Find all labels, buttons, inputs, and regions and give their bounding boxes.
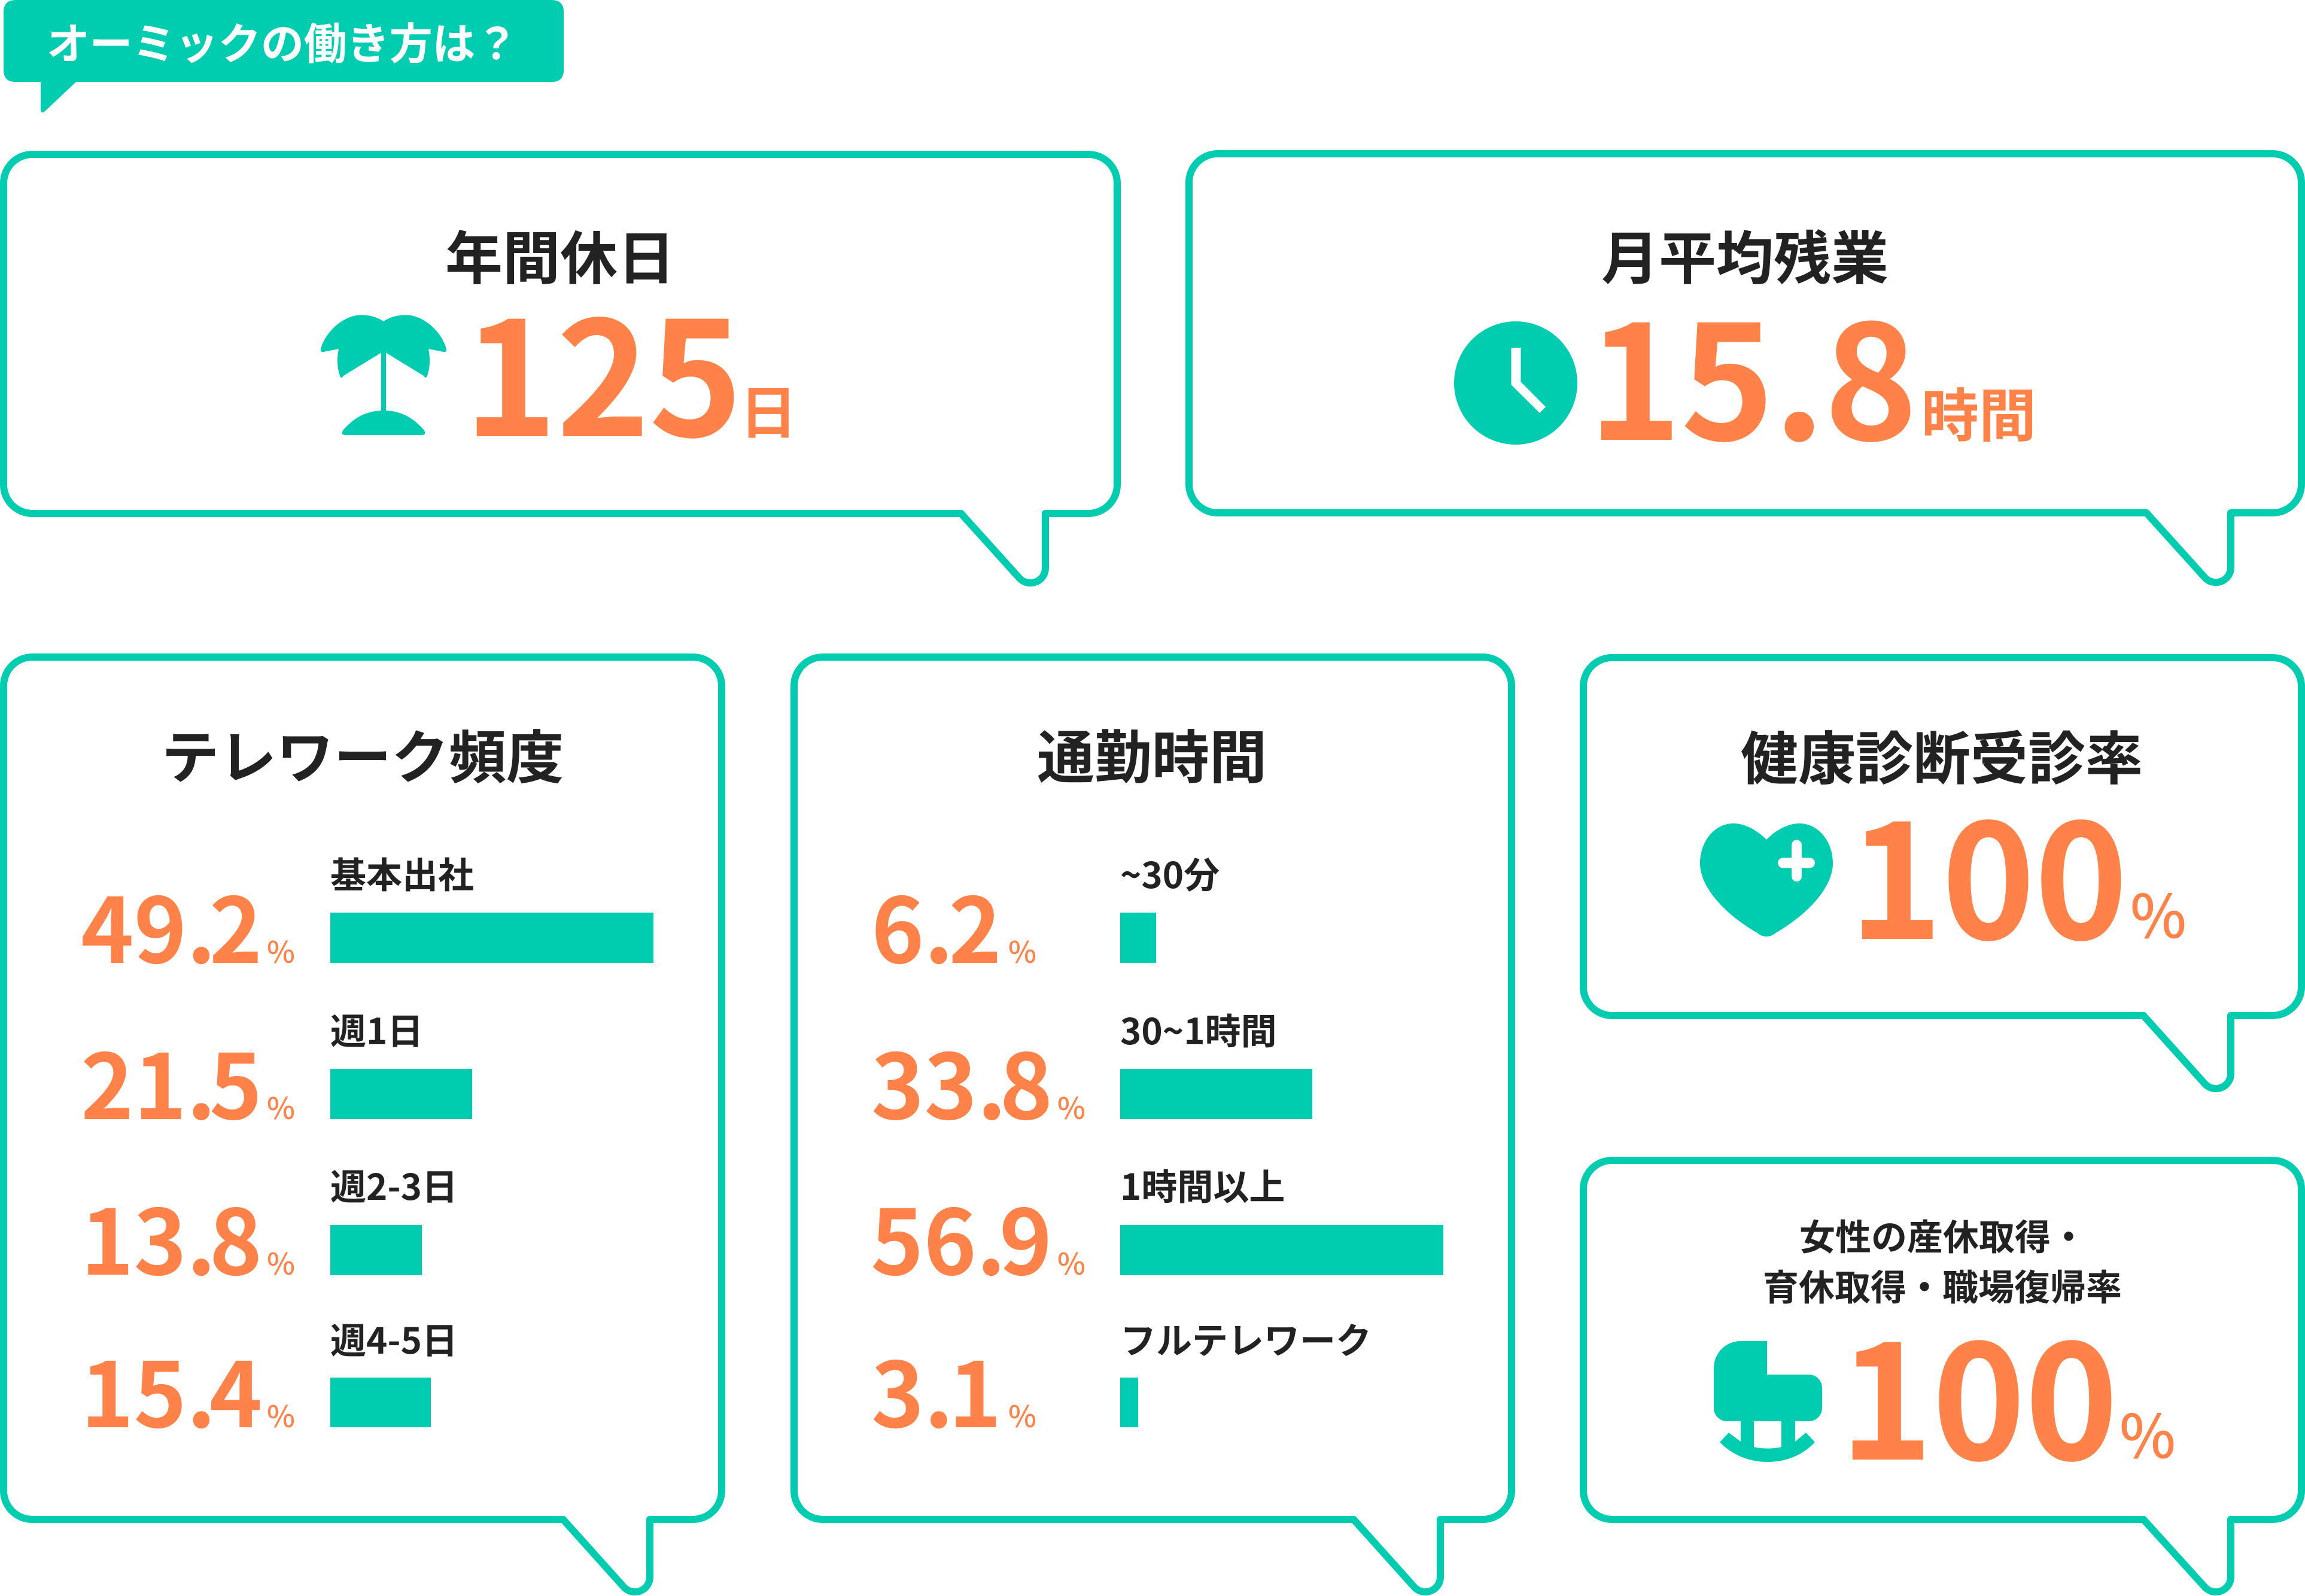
row: office attendance: 基本出社 (330, 847, 474, 899)
row: over 1 hour (871, 1159, 1443, 1301)
title tag: オーミックの働き方は？ (47, 9, 518, 72)
panel: annual holidays (4, 154, 1117, 583)
panel: telework frequency (4, 657, 722, 1592)
icon: clock (1454, 321, 1577, 445)
row: once a week (81, 1003, 472, 1145)
icon: palm tree (321, 315, 446, 435)
row: 30 minutes to 1 hour: 33.8 (871, 1016, 1053, 1145)
value: 125 days: 125 (464, 253, 742, 482)
row: full telework: % (1008, 1393, 1036, 1436)
row: up to 30 minutes (871, 847, 1220, 989)
heading: annual holidays: 年間休日 (445, 212, 675, 296)
row: full telework (871, 1312, 1372, 1454)
row: up to 30 minutes: % (1008, 929, 1036, 972)
row: 2-3 days a week: % (267, 1241, 295, 1284)
heading: telework frequency: テレワーク頻度 (162, 712, 564, 795)
row: once a week: 21.5 (81, 1016, 262, 1145)
row: 30 minutes to 1 hour: 30~1時間 (1120, 1003, 1277, 1055)
heading: commute time: 通勤時間 (1037, 712, 1267, 795)
heading: parental leave rate: 育休取得・職場復帰率 (1763, 1259, 2122, 1311)
row: up to 30 minutes: 6.2 (871, 859, 1002, 989)
unit: hours: 時間 (1921, 370, 2036, 453)
panel: average overtime (1189, 154, 2301, 582)
icon: heart with plus (1700, 823, 1833, 937)
row: 4-5 days a week: 15.4 (81, 1324, 262, 1454)
unit: days: 日 (740, 367, 797, 450)
row: over 1 hour: 1時間以上 (1120, 1159, 1285, 1211)
row: 4-5 days a week (81, 1312, 458, 1454)
row: once a week: % (267, 1085, 295, 1128)
row: 4-5 days a week: 週4-5日 (330, 1312, 458, 1364)
value: 15.8 hours: 15.8 (1588, 257, 1917, 486)
panel: commute time (794, 657, 1512, 1592)
title tag (4, 0, 564, 113)
unit: percent: % (2119, 1388, 2176, 1475)
panel: health checkup rate (1583, 658, 2301, 1089)
row: over 1 hour: 56.9 (871, 1171, 1052, 1301)
row: office attendance: 49.2 (81, 859, 262, 989)
row: 2-3 days a week: 13.8 (81, 1171, 262, 1301)
row: 2-3 days a week: 週2-3日 (330, 1159, 458, 1211)
row: office attendance: % (267, 929, 295, 972)
value: 100 percent: 100 (1839, 1276, 2118, 1506)
icon: rocking cradle (1714, 1341, 1822, 1462)
row: office attendance (81, 847, 653, 989)
unit: percent: % (2130, 868, 2187, 955)
row: 30 minutes to 1 hour (871, 1003, 1312, 1145)
row: 30 minutes to 1 hour: % (1057, 1085, 1085, 1128)
row: over 1 hour: % (1057, 1241, 1085, 1284)
heading: health checkup rate: 健康診断受診率 (1741, 713, 2143, 796)
row: once a week: 週1日 (330, 1003, 423, 1055)
row: full telework: 3.1 (871, 1324, 1002, 1454)
heading: parental leave rate (1763, 1209, 2122, 1311)
heading: parental leave rate: 女性の産休取得・ (1799, 1209, 2087, 1261)
row: 4-5 days a week: % (267, 1393, 295, 1436)
row: full telework: フルテレワーク (1120, 1312, 1372, 1364)
row: up to 30 minutes: ~30分 (1120, 847, 1220, 899)
row: 2-3 days a week (81, 1159, 458, 1301)
value: 100 percent: 100 (1849, 756, 2127, 985)
heading: average overtime: 月平均残業 (1601, 212, 1889, 296)
panel: parental leave rate (1583, 1160, 2301, 1592)
